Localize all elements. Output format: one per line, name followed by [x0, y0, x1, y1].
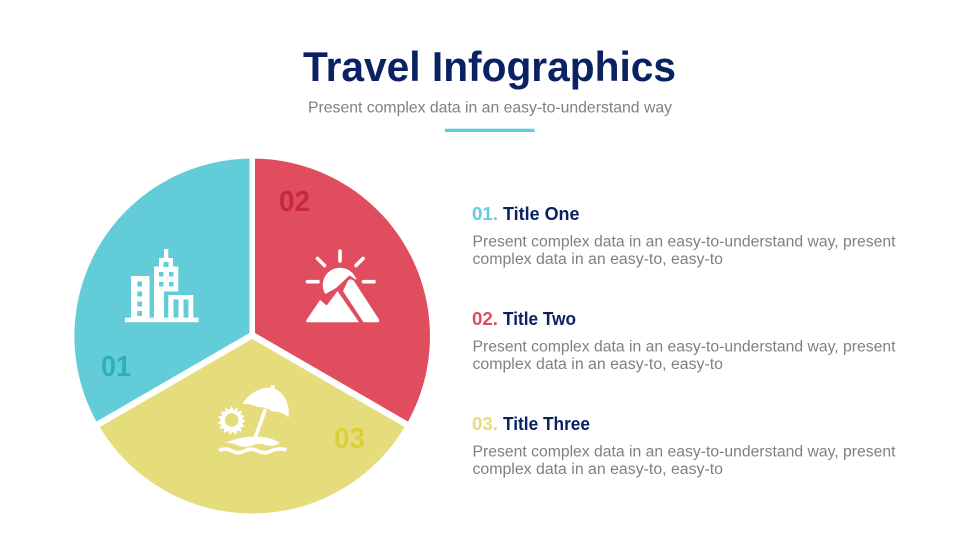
- item 03 body text: complex data in an easy-to, easy-to: [472, 461, 723, 478]
- icon: beach umbrella and sun: [218, 385, 289, 453]
- item 01 body text: complex data in an easy-to, easy-to: [472, 251, 723, 268]
- item 01 body text: [472, 234, 896, 268]
- item 01 heading: 01.: [472, 203, 498, 224]
- item 03 body text: [472, 444, 896, 478]
- item 01: [472, 203, 896, 268]
- item 03 heading: Title Three: [503, 413, 590, 434]
- header: [303, 43, 676, 132]
- item 02 heading: Title Two: [503, 308, 576, 329]
- subtitle: Present complex data in an easy-to-understand way: [308, 100, 672, 116]
- label 02: 02: [279, 186, 310, 218]
- item 01 heading: Title One: [503, 203, 580, 224]
- accent line: [445, 129, 534, 132]
- label 01: 01: [101, 351, 131, 383]
- segment 02: red: [255, 159, 430, 422]
- icon: city buildings: [125, 249, 198, 322]
- item 01 heading: [472, 203, 580, 224]
- item 02 heading: [472, 308, 576, 329]
- label 03: 03: [334, 423, 365, 455]
- item 03 heading: 03.: [472, 413, 498, 434]
- item 02: [472, 308, 896, 373]
- item 01 body text: Present complex data in an easy-to-understand way, present: [472, 234, 896, 250]
- item 03: [472, 413, 896, 478]
- item 02 body text: [472, 338, 896, 373]
- segment 03: yellow: [100, 339, 405, 514]
- item 02 heading: 02.: [472, 308, 498, 329]
- pie chart: [74, 159, 430, 514]
- icon: sun over mountains: [300, 251, 385, 325]
- item 03 body text: Present complex data in an easy-to-understand way, present: [472, 444, 896, 460]
- item 02 body text: Present complex data in an easy-to-understand way, present: [472, 338, 896, 356]
- item 02 body text: complex data in an easy-to, easy-to: [472, 356, 723, 373]
- segment 01: blue: [74, 159, 250, 422]
- title: Travel Infographics: [303, 43, 676, 90]
